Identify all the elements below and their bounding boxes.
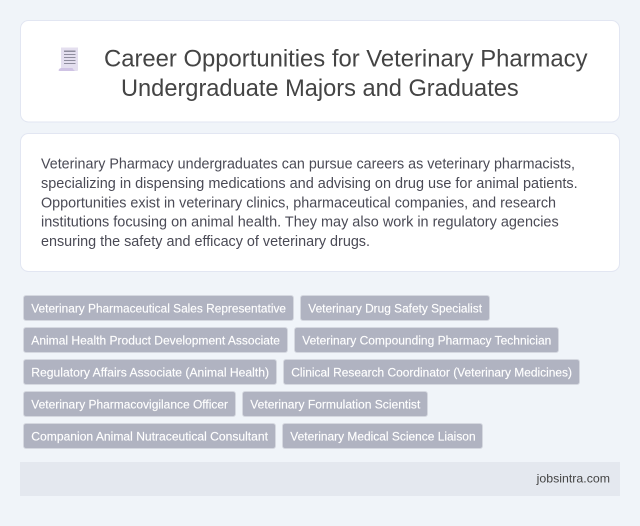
- tag: Veterinary Pharmacovigilance Officer: [31, 397, 228, 411]
- tag: [242, 392, 428, 416]
- title: [104, 46, 588, 102]
- tag: [24, 360, 276, 384]
- tag: Companion Animal Nutraceutical Consultant: [31, 429, 269, 443]
- description text: Opportunities exist in veterinary clinics, pharmaceutical companies, and research: [41, 195, 556, 211]
- tag: [294, 328, 558, 352]
- panel: header: [20, 20, 620, 122]
- description text: institutions focusing on animal health. They may also work in regulatory agencies: [41, 215, 559, 231]
- title: Undergraduate Majors and Graduates: [121, 75, 519, 102]
- description text: specializing in dispensing medications and advising on drug use for animal patients.: [41, 176, 578, 192]
- tag: Veterinary Drug Safety Specialist: [308, 301, 483, 315]
- tag: Regulatory Affairs Associate (Animal Health): [31, 365, 269, 379]
- tag: [24, 392, 236, 416]
- icon: document scroll: [58, 48, 78, 71]
- description text: Veterinary Pharmacy undergraduates can pursue careers as veterinary pharmacists,: [41, 156, 575, 172]
- tag: [300, 296, 490, 320]
- panel: career tags: [24, 296, 580, 448]
- tag: Veterinary Pharmaceutical Sales Representative: [31, 301, 286, 315]
- tag: [284, 360, 580, 384]
- tag: [24, 328, 288, 352]
- description text: ensuring the safety and efficacy of veterinary drugs.: [41, 234, 370, 250]
- tag: Veterinary Medical Science Liaison: [290, 429, 476, 443]
- tag: [282, 424, 482, 448]
- tag: Veterinary Compounding Pharmacy Technician: [302, 333, 551, 347]
- tag: [24, 296, 294, 320]
- tag: Animal Health Product Development Associate: [31, 333, 280, 347]
- footer source text: jobsintra.com: [536, 472, 610, 486]
- description text: [41, 156, 578, 250]
- title: Career Opportunities for Veterinary Pharmacy: [104, 46, 588, 73]
- tag: Clinical Research Coordinator (Veterinary Medicines): [291, 365, 572, 379]
- tag: [24, 424, 276, 448]
- panel: description: [20, 134, 620, 272]
- tag: Veterinary Formulation Scientist: [250, 397, 421, 411]
- footer: [20, 462, 620, 496]
